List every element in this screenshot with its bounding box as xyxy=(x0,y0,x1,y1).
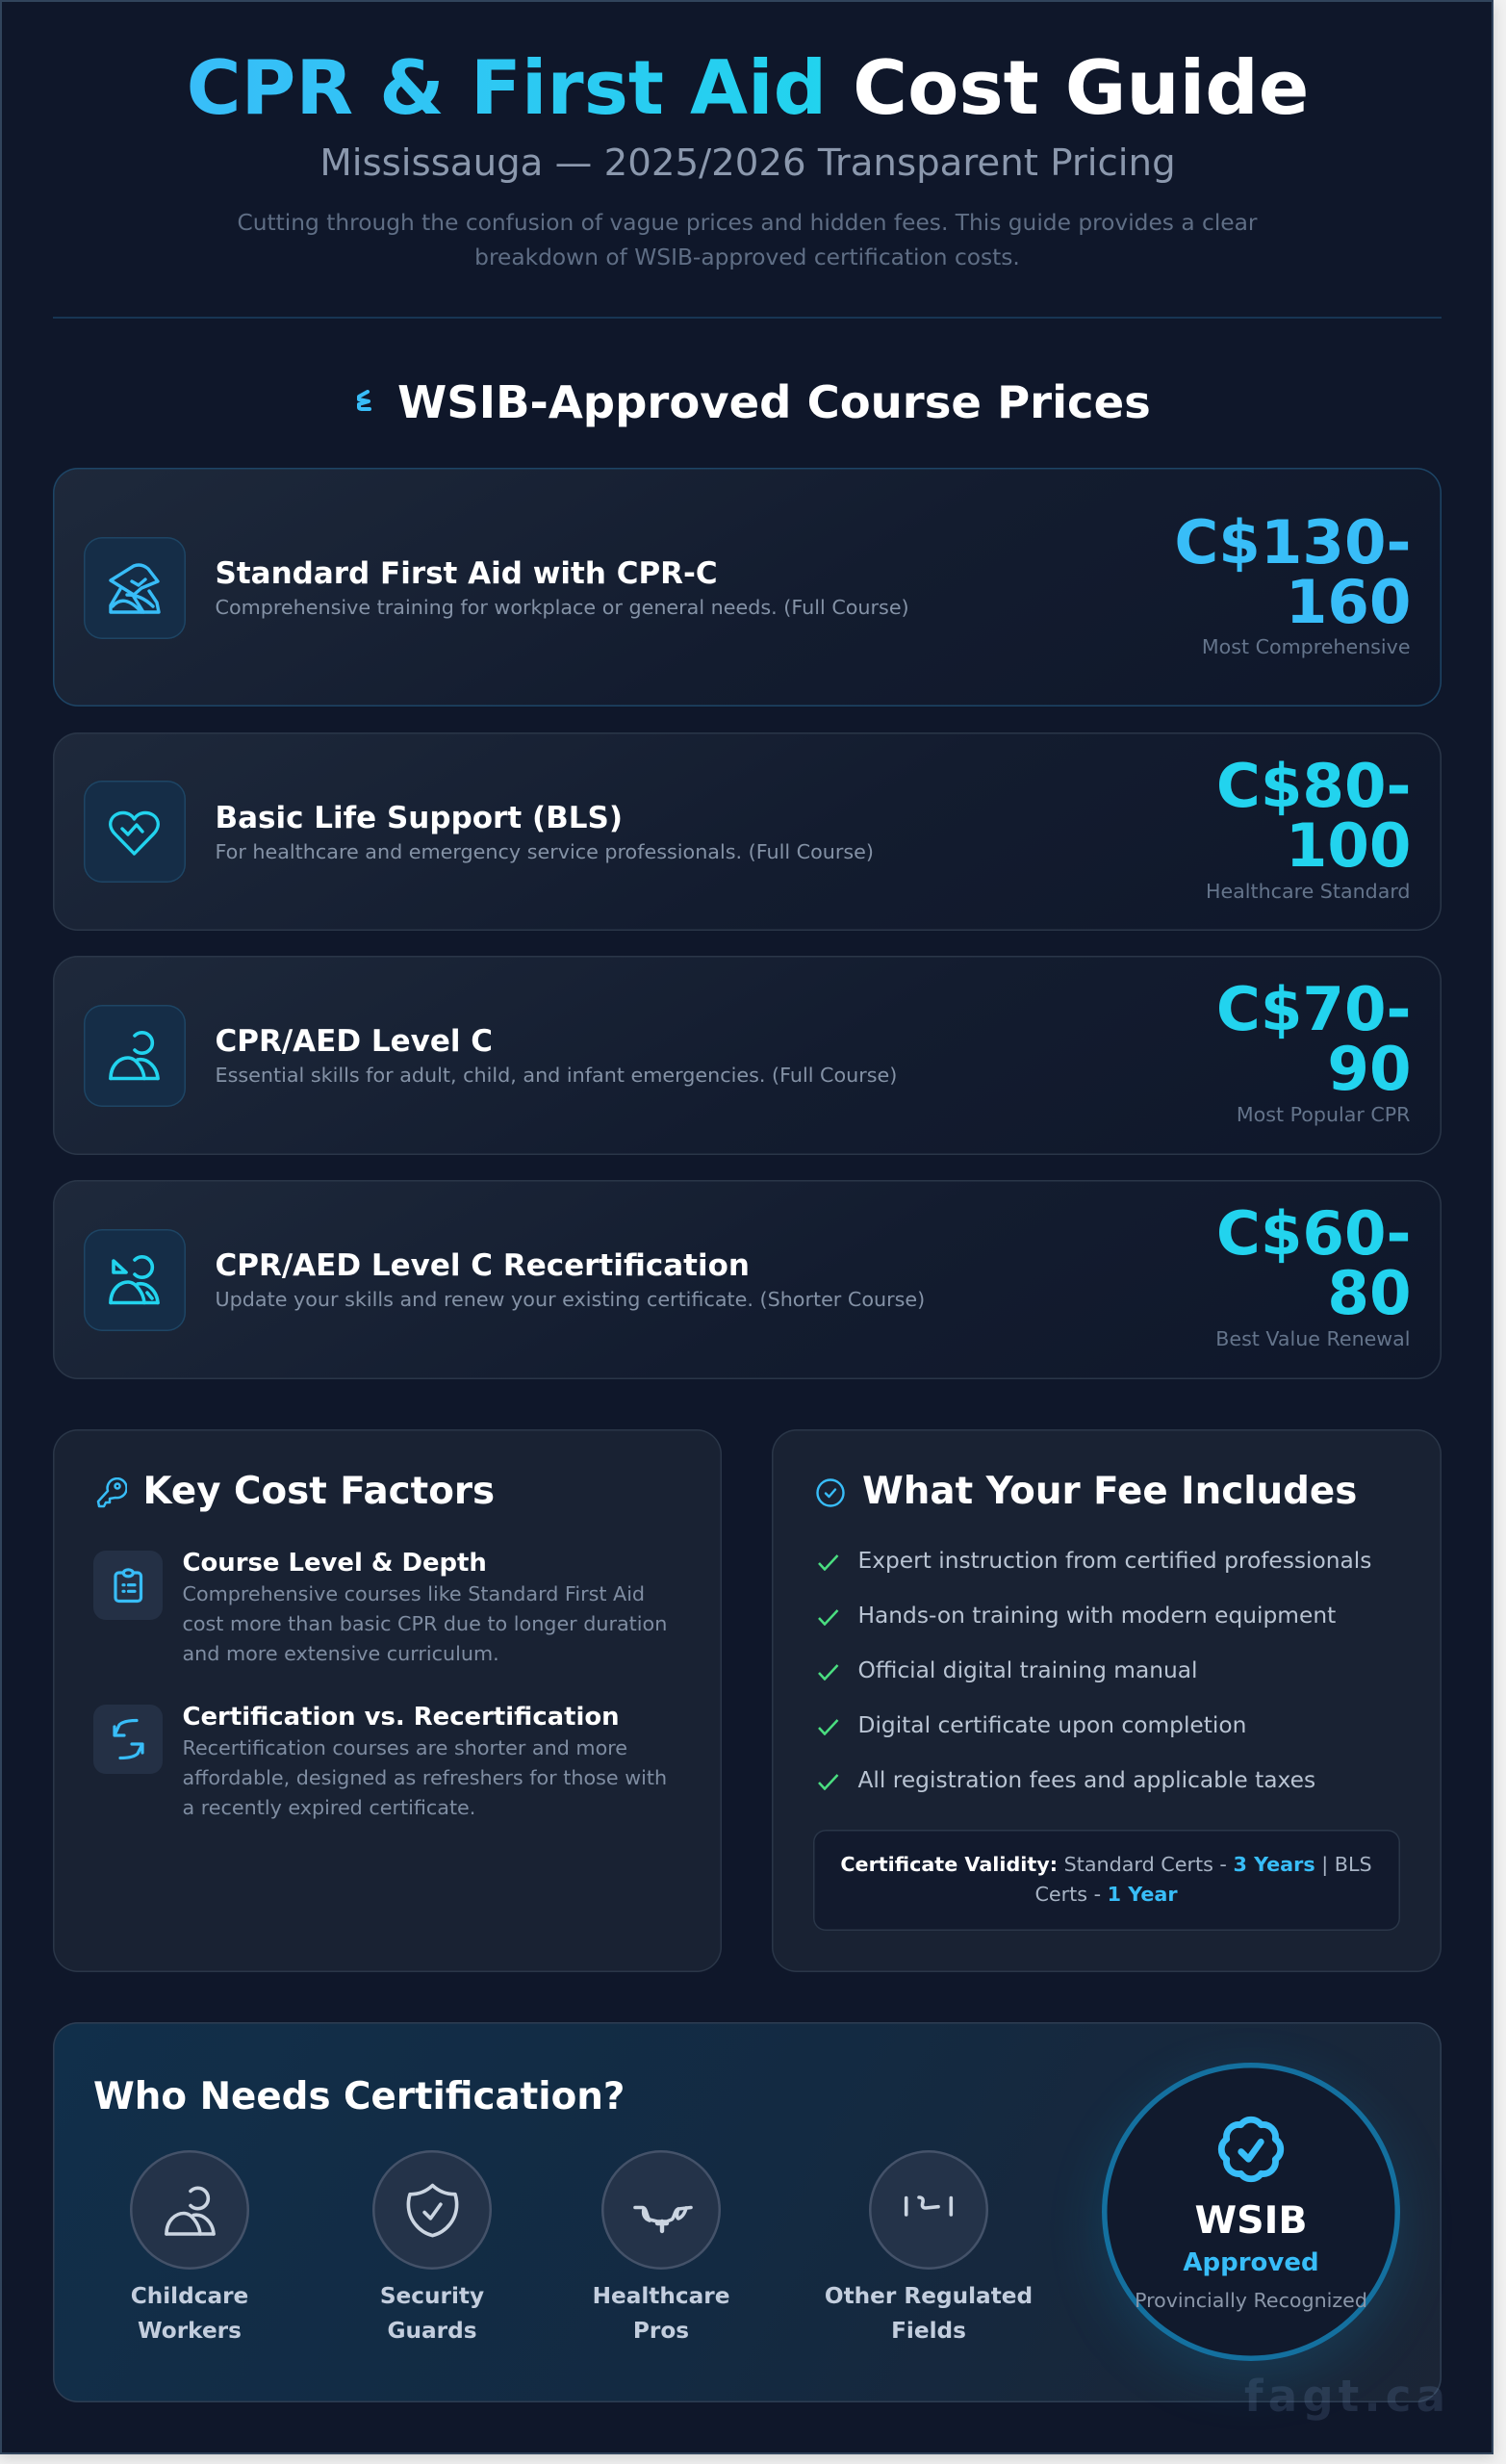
factor text: Comprehensive courses like Standard First Aid xyxy=(183,1582,645,1605)
price xyxy=(1174,507,1411,637)
label: Guards xyxy=(387,2318,477,2344)
price xyxy=(1216,1198,1411,1328)
label: Healthcare xyxy=(593,2283,729,2309)
label xyxy=(380,2283,484,2344)
icon: person xyxy=(130,2150,249,2270)
course description: Essential skills for adult, child, and infant emergencies. (Full Course) xyxy=(216,1064,897,1087)
heading: Key Cost Factors xyxy=(142,1470,495,1513)
badge status: Approved xyxy=(1183,2248,1319,2277)
badge: WSIB approved xyxy=(1102,2063,1400,2361)
label: Pros xyxy=(633,2318,689,2344)
course name: Standard First Aid with CPR-C xyxy=(216,556,718,591)
subtitle: Mississauga — 2025/2026 Transparent Pricing xyxy=(319,141,1176,185)
course name: Basic Life Support (BLS) xyxy=(216,801,623,835)
icon: regulated fields glyph xyxy=(869,2150,988,2270)
label: Security xyxy=(380,2283,484,2309)
icon: section dollar glyph xyxy=(357,390,371,411)
label xyxy=(825,2283,1033,2344)
list item: Hands-on training with modern equipment xyxy=(858,1603,1336,1629)
price label: Best Value Renewal xyxy=(1215,1327,1411,1350)
course name: CPR/AED Level C Recertification xyxy=(216,1247,750,1282)
factor: course level xyxy=(93,1548,667,1665)
audience: healthcare pros xyxy=(593,2150,729,2344)
intro text: Cutting through the confusion of vague prices and hidden fees. This guide provides a clear xyxy=(237,210,1257,236)
heading: Who Needs Certification? xyxy=(93,2075,625,2118)
heading: What Your Fee Includes xyxy=(862,1470,1357,1513)
price: 80 xyxy=(1327,1258,1411,1328)
label xyxy=(131,2283,248,2344)
price: C$60- xyxy=(1216,1198,1411,1269)
panel: what your fee includes xyxy=(772,1429,1442,1972)
icon: clipboard xyxy=(92,1551,162,1620)
label: Fields xyxy=(891,2318,966,2344)
list item: Official digital training manual xyxy=(858,1657,1198,1683)
callout: certificate validity: Certs - 1 Year xyxy=(1034,1883,1178,1906)
price: C$80- xyxy=(1216,751,1411,821)
icon: check circle xyxy=(816,1478,845,1507)
icon: person xyxy=(83,1005,185,1107)
factor title: Course Level & Depth xyxy=(183,1548,487,1577)
intro text: breakdown of WSIB-approved certification costs. xyxy=(474,244,1020,270)
icon: key xyxy=(96,1477,127,1507)
callout: certificate validity: Certificate Validity: Standard Certs - 3 Years | BLS xyxy=(840,1852,1372,1875)
factor text xyxy=(183,1736,667,1819)
factor text: and more extensive curriculum. xyxy=(183,1642,499,1665)
callout: certificate validity xyxy=(813,1829,1399,1931)
intro text xyxy=(237,210,1257,270)
factor text: a recently expired certificate. xyxy=(183,1796,475,1819)
panel: CPR/AED Level C price card xyxy=(52,956,1442,1155)
price label: Most Comprehensive xyxy=(1202,635,1411,658)
icon: heart with pulse xyxy=(83,781,185,883)
label: Workers xyxy=(138,2318,242,2344)
title: CPR & First Aid Cost Guide xyxy=(187,45,1309,132)
course description: For healthcare and emergency service professionals. (Full Course) xyxy=(216,840,874,863)
factor: certification vs recertification xyxy=(93,1702,667,1819)
icon: stethoscope xyxy=(601,2150,721,2270)
list item: Expert instruction from certified professionals xyxy=(858,1548,1371,1574)
price xyxy=(1216,751,1411,881)
watermark: fagt.ca xyxy=(1244,2371,1450,2422)
course description: Comprehensive training for workplace or general needs. (Full Course) xyxy=(216,596,909,619)
included items list xyxy=(818,1548,1371,1793)
price xyxy=(1216,974,1411,1104)
price: 90 xyxy=(1327,1034,1411,1104)
panel: Standard First Aid price card xyxy=(52,468,1442,706)
icon: graduation cap xyxy=(83,537,185,639)
badge note: Provincially Recognized xyxy=(1135,2289,1367,2312)
factor text: affordable, designed as refreshers for those with xyxy=(183,1766,667,1789)
icon: shield xyxy=(372,2150,492,2270)
badge title: WSIB xyxy=(1194,2198,1308,2243)
icon: refresh arrows xyxy=(92,1705,162,1774)
section heading: course prices: WSIB-Approved Course Prices xyxy=(397,376,1151,428)
price label: Healthcare Standard xyxy=(1206,880,1411,903)
panel: key cost factors xyxy=(52,1429,722,1971)
factor text: cost more than basic CPR due to longer duration xyxy=(183,1612,667,1635)
audience: childcare workers xyxy=(130,2150,249,2344)
audience: security guards xyxy=(372,2150,492,2344)
list item: All registration fees and applicable taxes xyxy=(858,1767,1315,1793)
panel: Basic Life Support price card xyxy=(52,732,1442,931)
course name: CPR/AED Level C xyxy=(216,1024,493,1059)
price: C$70- xyxy=(1216,974,1411,1044)
price: 100 xyxy=(1286,810,1411,881)
label: Childcare xyxy=(131,2283,248,2309)
factor text xyxy=(183,1582,667,1665)
audience: other regulated fields xyxy=(825,2150,1033,2344)
factor text: Recertification courses are shorter and more xyxy=(183,1736,627,1759)
price: 160 xyxy=(1286,567,1411,637)
course description: Update your skills and renew your existing certificate. (Shorter Course) xyxy=(216,1288,925,1311)
label xyxy=(593,2283,729,2344)
panel: who needs certification xyxy=(52,2022,1442,2402)
price: C$130- xyxy=(1174,507,1411,578)
panel: CPR/AED recertification price card xyxy=(52,1180,1442,1379)
label: Other Regulated xyxy=(825,2283,1033,2309)
icon: check badge xyxy=(1218,2116,1284,2183)
icon: person with triangle xyxy=(83,1229,185,1331)
factor title: Certification vs. Recertification xyxy=(183,1702,620,1731)
list item: Digital certificate upon completion xyxy=(858,1712,1246,1738)
price label: Most Popular CPR xyxy=(1237,1103,1411,1126)
